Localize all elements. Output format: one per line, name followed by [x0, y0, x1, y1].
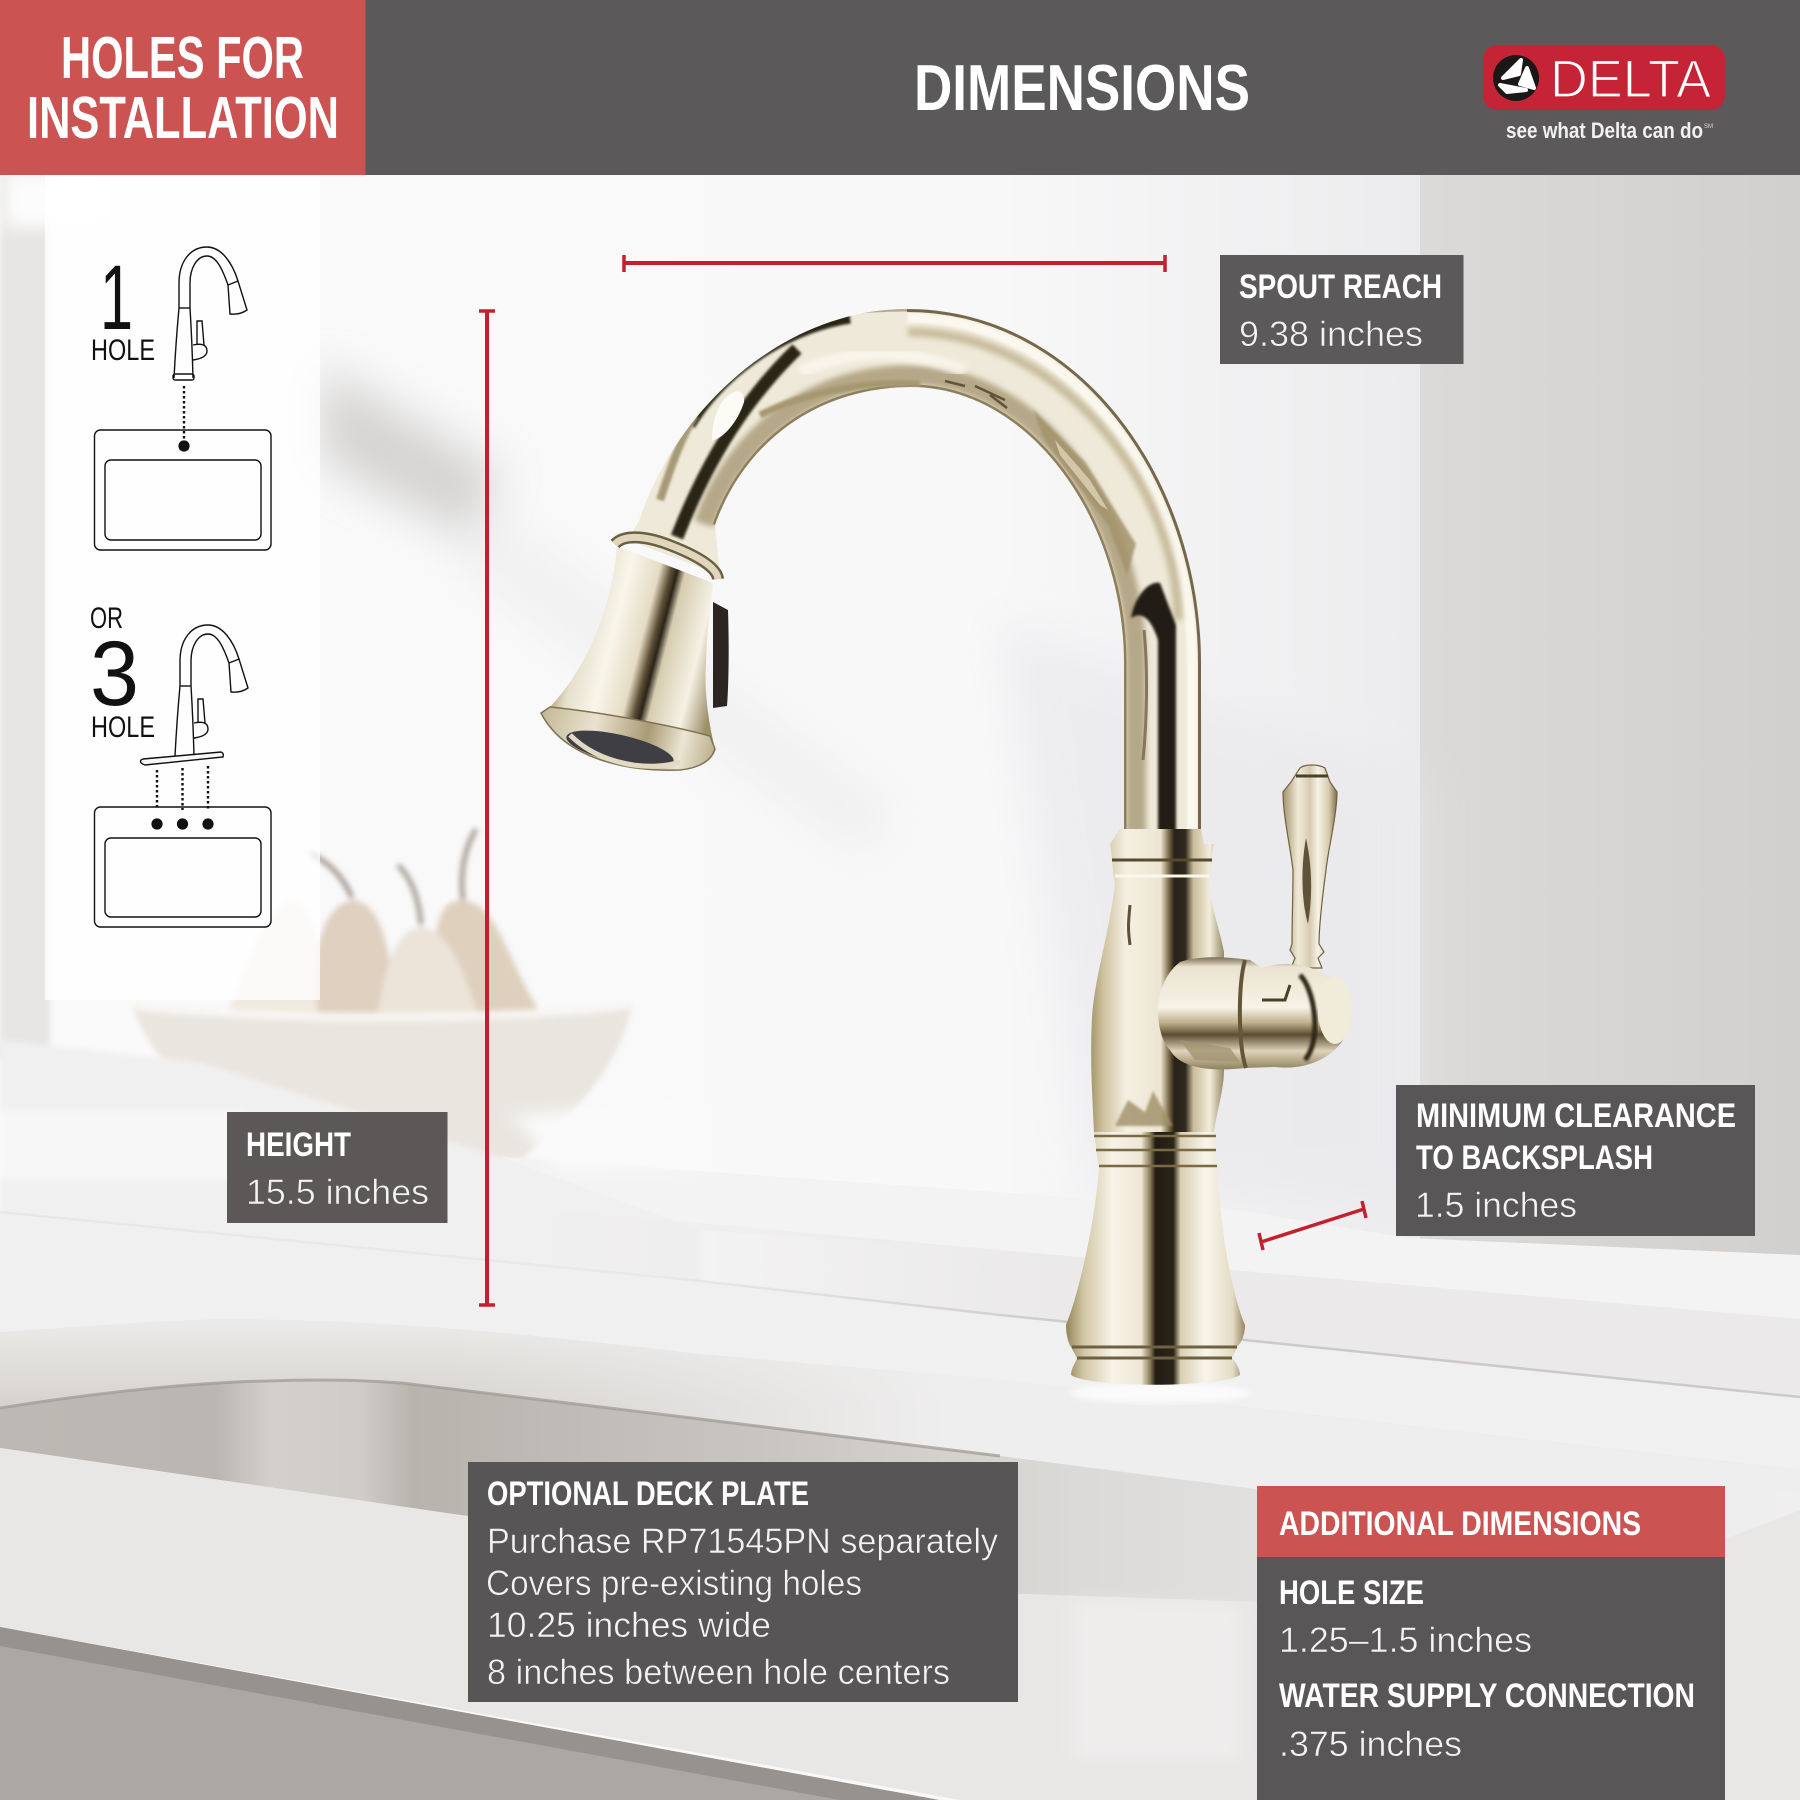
red heading: holes for installation: HOLES FOR — [61, 25, 304, 91]
hole size — [1279, 1574, 1532, 1660]
delta logo: SM — [1704, 124, 1713, 130]
spray nozzle — [541, 707, 715, 775]
water supply connection: WATER SUPPLY CONNECTION — [1279, 1677, 1695, 1715]
handle cylinder — [1158, 957, 1352, 1069]
callout: minimum clearance to backsplash: 1.5 inches — [1415, 1186, 1577, 1225]
header bar — [365, 0, 1800, 175]
callout: optional deck plate: OPTIONAL DECK PLATE — [487, 1475, 809, 1513]
fruit bowl with pears — [132, 829, 632, 1176]
red heading: holes for installation: INSTALLATION — [27, 85, 339, 151]
delta logo: DELTA — [1550, 50, 1712, 109]
one hole number: 1 — [100, 247, 133, 349]
hole size: 1.25–1.5 inches — [1279, 1621, 1532, 1660]
spray head — [541, 537, 729, 775]
additional dimensions heading — [1257, 1486, 1725, 1557]
callout: optional deck plate — [468, 1462, 1018, 1702]
dimension line: height — [479, 310, 495, 1305]
dimension line: backsplash clearance — [1259, 1201, 1366, 1250]
delta logo: see what Delta can do — [1506, 118, 1703, 143]
callout: optional deck plate: Purchase RP71545PN separately — [487, 1522, 998, 1561]
callout: optional deck plate: 8 inches between hole centers — [487, 1653, 950, 1692]
callout: spout reach — [1220, 255, 1464, 364]
three hole label: HOLE — [91, 711, 155, 744]
callout: height — [227, 1112, 448, 1223]
title: DIMENSIONS — [914, 51, 1250, 124]
red heading: holes for installation — [0, 0, 366, 175]
callout: minimum clearance to backsplash: MINIMUM CLEARANCE — [1416, 1097, 1736, 1135]
water supply connection: .375 inches — [1279, 1725, 1462, 1764]
faucet — [541, 309, 1352, 1385]
dimension line: spout reach — [624, 255, 1165, 272]
left panel: holes for installation — [45, 175, 320, 1000]
callout: height: HEIGHT — [246, 1126, 351, 1164]
faucet arch spout — [628, 309, 1201, 835]
one hole label: HOLE — [91, 334, 155, 367]
delta logo — [1483, 45, 1725, 143]
countertop and marble — [0, 1100, 1800, 1800]
spray collar ring — [615, 537, 718, 579]
handle lever — [1283, 765, 1337, 968]
callout: spout reach: SPOUT REACH — [1239, 268, 1442, 306]
icon: single-hole sink — [94, 386, 271, 550]
callout: spout reach: 9.38 inches — [1239, 315, 1423, 354]
back ledge at left, soft-focus — [0, 1040, 700, 1285]
icon: three-hole faucet with deck plate — [140, 625, 248, 765]
additional dimensions heading: ADDITIONAL DIMENSIONS — [1279, 1505, 1641, 1543]
icon: single-hole faucet — [173, 247, 247, 380]
panel: additional dimensions — [1257, 1486, 1725, 1800]
or label: OR — [90, 602, 123, 635]
callout: optional deck plate: 10.25 inches wide — [487, 1606, 771, 1645]
faucet body — [1066, 829, 1245, 1385]
callout: optional deck plate: Covers pre-existing holes — [486, 1564, 862, 1603]
hole size: HOLE SIZE — [1279, 1574, 1424, 1612]
three hole number: 3 — [90, 623, 139, 725]
callout: minimum clearance to backsplash — [1396, 1085, 1755, 1236]
callout: height: 15.5 inches — [246, 1173, 429, 1212]
water supply connection — [1279, 1677, 1695, 1764]
icon: three-hole sink — [94, 766, 271, 927]
callout: minimum clearance to backsplash: TO BACKSPLASH — [1416, 1139, 1653, 1177]
